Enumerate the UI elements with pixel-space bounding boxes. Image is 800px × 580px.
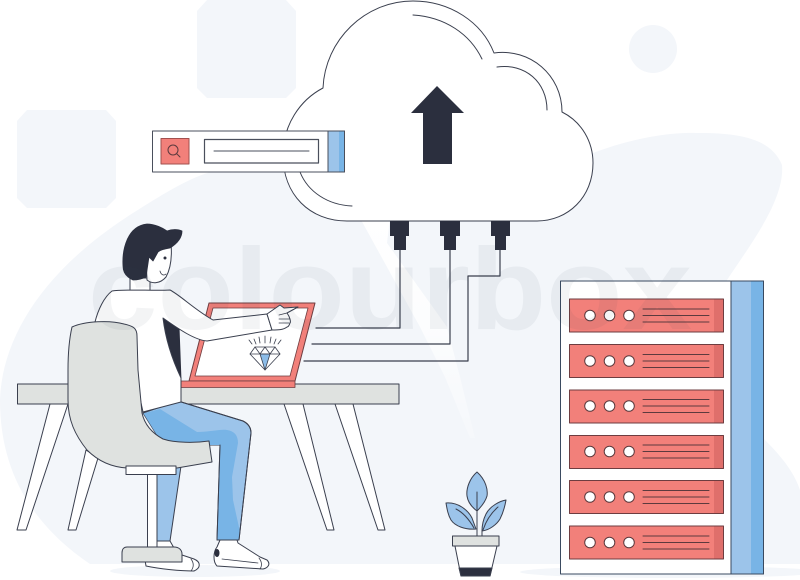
chair body bbox=[68, 322, 212, 468]
shoe toe line bbox=[259, 558, 261, 569]
chair base bbox=[122, 547, 182, 562]
laptop screen frame bbox=[189, 303, 315, 381]
connector plugs bbox=[390, 221, 510, 250]
smile bbox=[160, 271, 166, 275]
eye bbox=[164, 256, 166, 260]
search bar blue end bbox=[328, 131, 344, 172]
chair seat plate bbox=[126, 466, 176, 474]
right leaf bbox=[482, 500, 506, 531]
rack side strip bbox=[751, 282, 763, 574]
face bbox=[146, 243, 171, 283]
upload arrow bbox=[411, 86, 464, 164]
chair bbox=[68, 322, 212, 562]
floor shadow right bbox=[520, 566, 800, 578]
desk legs bbox=[17, 404, 385, 530]
pot body bbox=[455, 546, 497, 576]
person bbox=[95, 224, 298, 571]
server unit 2 bbox=[570, 344, 724, 378]
plant stems bbox=[477, 510, 482, 536]
left leaf bbox=[446, 503, 476, 529]
chair post bbox=[148, 474, 157, 548]
desk top bbox=[18, 384, 399, 404]
background blob bbox=[0, 133, 800, 564]
cloud bbox=[283, 1, 593, 250]
finger lines bbox=[279, 313, 290, 323]
shoe lace line bbox=[222, 559, 258, 563]
search input line bbox=[214, 150, 309, 152]
leaf veins bbox=[456, 492, 498, 530]
cloud outline bbox=[283, 1, 593, 221]
server unit 6 bbox=[570, 526, 724, 559]
search bar dark blue strip bbox=[339, 132, 344, 172]
cloud inner highlight lines bbox=[300, 15, 547, 206]
torso and arm shirt bbox=[95, 290, 272, 412]
laptop bbox=[180, 303, 315, 388]
shoe heel spot bbox=[214, 549, 220, 557]
potted plant bbox=[446, 472, 506, 576]
icon: diamond bbox=[249, 336, 281, 370]
cable wires bbox=[304, 250, 500, 361]
pot dark band bbox=[459, 568, 492, 576]
rack side panel bbox=[731, 281, 764, 574]
hand bbox=[267, 305, 298, 330]
search bar frame bbox=[152, 131, 344, 172]
back shoe toe line bbox=[191, 559, 193, 571]
decorative tile top bbox=[197, 0, 296, 98]
top leaf bbox=[467, 472, 487, 511]
server unit 5 bbox=[570, 480, 724, 514]
search button bbox=[161, 138, 189, 164]
search input bbox=[204, 140, 318, 163]
front leg bbox=[143, 401, 251, 540]
hair and cap bbox=[123, 224, 182, 280]
laptop screen bbox=[195, 308, 308, 376]
rack body bbox=[560, 281, 764, 574]
icon: magnifier bbox=[168, 145, 180, 157]
neck bbox=[130, 278, 150, 292]
floor shadow left bbox=[110, 565, 280, 577]
white wedge in background bbox=[360, 218, 475, 438]
server rack bbox=[560, 281, 764, 574]
server unit 4 bbox=[570, 436, 724, 468]
front shoe bbox=[214, 540, 269, 569]
server unit 1 bbox=[570, 299, 724, 332]
search bar bbox=[152, 131, 344, 172]
desk bbox=[17, 384, 399, 530]
front leg outline bbox=[178, 401, 251, 540]
back leg bbox=[157, 466, 181, 541]
decorative circle bbox=[629, 25, 677, 73]
back shoe bbox=[145, 541, 199, 571]
watermark text: colourbox bbox=[88, 224, 692, 354]
inner jacket bbox=[163, 318, 181, 378]
front leg shading bbox=[144, 409, 240, 540]
laptop base bbox=[180, 381, 295, 388]
decorative tile left bbox=[17, 110, 116, 208]
pot rim bbox=[452, 536, 499, 546]
server unit 3 bbox=[570, 390, 724, 423]
